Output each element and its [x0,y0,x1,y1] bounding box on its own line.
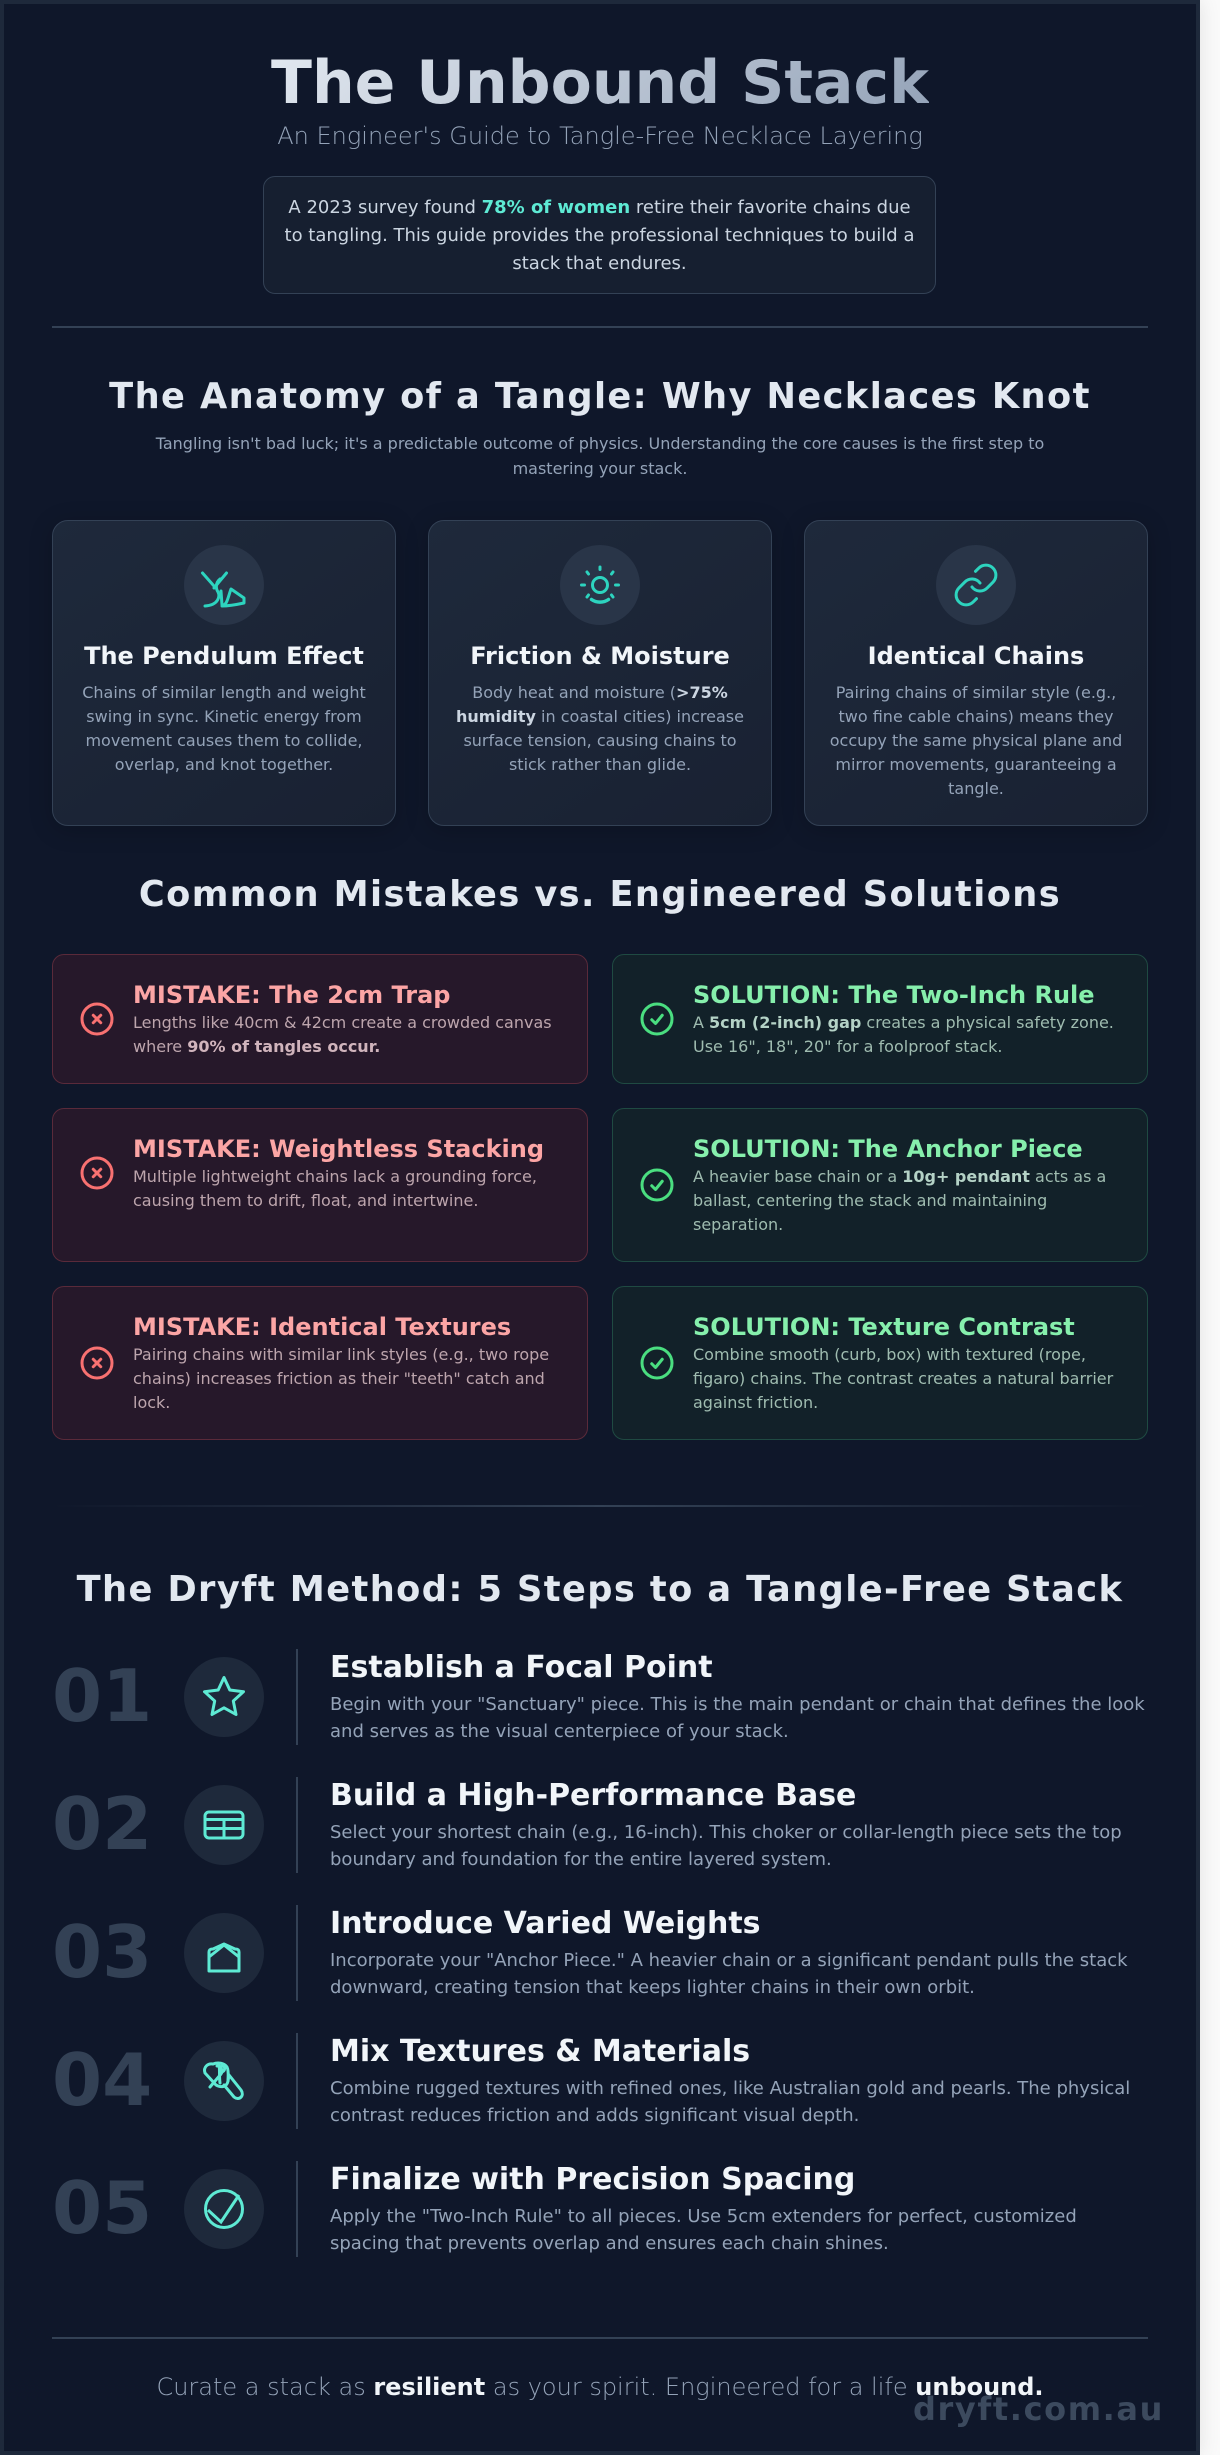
panel: solution two-inch rule [612,954,1148,1084]
subtitle: An Engineer's Guide to Tangle-Free Necklace Layering [277,122,923,150]
step text [330,2078,1130,2126]
solution text: separation. [693,1215,783,1234]
icon: check [184,2169,264,2249]
step number: 02 [52,1782,152,1866]
step title: Introduce Varied Weights [330,1906,761,1941]
card text: surface tension, causing chains to [463,731,737,750]
panel: mistake 2cm trap [52,954,588,1084]
step text: Select your shortest chain (e.g., 16-inch). This choker or collar-length piece sets the top [330,1822,1122,1843]
title: The Unbound Stack [271,48,929,118]
watermark: dryft.com.au [913,2390,1164,2428]
card text: humidity in coastal cities) increase [456,707,744,726]
card title: The Pendulum Effect [84,642,364,670]
step text: boundary and foundation for the entire layered system. [330,1849,832,1870]
step text [330,1694,1145,1742]
step 2 [52,1777,1122,1873]
card text [456,683,744,774]
step title: Finalize with Precision Spacing [330,2162,855,2197]
solution text: A heavier base chain or a 10g+ pendant acts as a [693,1167,1106,1186]
solution title: SOLUTION: Texture Contrast [693,1313,1075,1341]
card text: Chains of similar length and weight [82,683,366,702]
icon: check circle [640,1168,674,1202]
anatomy intro text: mastering your stack. [513,459,687,478]
step text: spacing that prevents overlap and ensures each chain shines. [330,2233,889,2254]
step text: Incorporate your "Anchor Piece." A heavier chain or a significant pendant pulls the stack [330,1950,1128,1971]
panel: solution texture contrast [612,1286,1148,1440]
card text: Pairing chains of similar style (e.g., [836,683,1116,702]
mistake text: Multiple lightweight chains lack a grounding force, [133,1167,537,1186]
card title: Friction & Moisture [470,642,730,670]
step number: 05 [52,2166,152,2250]
mistake text: where 90% of tangles occur. [133,1037,380,1056]
step text: Combine rugged textures with refined ones, like Australian gold and pearls. The physical [330,2078,1130,2099]
step text: contrast reduces friction and adds significant visual depth. [330,2105,859,2126]
solution text: A 5cm (2-inch) gap creates a physical safety zone. [693,1013,1114,1032]
intro text: A 2023 survey found 78% of women retire their favorite chains due [288,197,911,218]
card title: Identical Chains [868,642,1084,670]
icon: tools [184,2041,264,2121]
mistake text: Lengths like 40cm & 42cm create a crowded canvas [133,1013,552,1032]
step 5 [52,2161,1077,2257]
mistake text: causing them to drift, float, and intertwine. [133,1191,478,1210]
icon: check circle [640,1346,674,1380]
step title: Establish a Focal Point [330,1650,713,1685]
card text: stick rather than glide. [509,755,691,774]
step title: Mix Textures & Materials [330,2034,750,2069]
step 1 [52,1649,1145,1745]
card text [82,683,366,774]
solution text: ballast, centering the stack and maintaining [693,1191,1047,1210]
icon: weight [184,1913,264,1993]
card text: tangle. [948,779,1004,798]
panel: mistake identical textures [52,1286,588,1440]
mistake text: chains) increases friction as their "teeth" catch and [133,1369,545,1388]
mistake title: MISTAKE: Identical Textures [133,1313,511,1341]
card text: two fine cable chains) means they [838,707,1114,726]
icon: pendulum [184,545,264,625]
panel: identical chains [804,520,1148,826]
heading: anatomy of a tangle: The Anatomy of a Tangle: Why Necklaces Knot [109,376,1091,417]
solution title: SOLUTION: The Anchor Piece [693,1135,1083,1163]
anatomy intro text [156,434,1044,478]
mistake text: Pairing chains with similar link styles (e.g., two rope [133,1345,549,1364]
step number: 04 [52,2038,152,2122]
step text: Apply the "Two-Inch Rule" to all pieces. Use 5cm extenders for perfect, customized [330,2206,1077,2227]
panel: pendulum effect [52,520,396,826]
mistake title: MISTAKE: The 2cm Trap [133,981,450,1009]
solution text [693,1345,1114,1412]
step number: 03 [52,1910,152,1994]
step text: downward, creating tension that keeps lighter chains in their own orbit. [330,1977,975,1998]
card text: Body heat and moisture (>75% [472,683,728,702]
mistake title: MISTAKE: Weightless Stacking [133,1135,544,1163]
solution title: SOLUTION: The Two-Inch Rule [693,981,1095,1009]
step text [330,2206,1077,2254]
icon: base panel [184,1785,264,1865]
card text: movement causes them to collide, [85,731,363,750]
solution text: Combine smooth (curb, box) with textured (rope, [693,1345,1086,1364]
card text: swing in sync. Kinetic energy from [86,707,362,726]
card text: occupy the same physical plane and [830,731,1122,750]
icon: star [184,1657,264,1737]
mistake text [133,1167,537,1210]
intro text: stack that endures. [512,253,687,274]
panel: solution anchor piece [612,1108,1148,1262]
icon: x circle [80,1156,114,1190]
heading: mistakes vs solutions: Common Mistakes vs. Engineered Solutions [139,874,1061,915]
card text [830,683,1122,798]
icon: x circle [80,1002,114,1036]
solution text: against friction. [693,1393,818,1412]
intro text [285,197,914,274]
heading: the dryft method: The Dryft Method: 5 Steps to a Tangle-Free Stack [77,1569,1123,1610]
footer tagline: Curate a stack as resilient as your spirit. Engineered for a life unbound. [156,2373,1044,2401]
intro text: to tangling. This guide provides the professional techniques to build a [285,225,914,246]
card text: overlap, and knot together. [115,755,333,774]
icon: check circle [640,1002,674,1036]
panel: mistake weightless stacking [52,1108,588,1262]
step text [330,1822,1122,1870]
step 4 [52,2033,1130,2129]
step number: 01 [52,1654,152,1738]
icon: chain link [936,545,1016,625]
intro callout [263,176,936,294]
step text: and serves as the visual centerpiece of your stack. [330,1721,789,1742]
card text: mirror movements, guaranteeing a [835,755,1117,774]
icon: sun [560,545,640,625]
solution text: figaro) chains. The contrast creates a natural barrier [693,1369,1113,1388]
step text: Begin with your "Sanctuary" piece. This is the main pendant or chain that defines the look [330,1694,1145,1715]
step text [330,1950,1128,1998]
step title: Build a High-Performance Base [330,1778,856,1813]
mistake text: lock. [133,1393,170,1412]
mistake text [133,1345,549,1412]
anatomy intro text: Tangling isn't bad luck; it's a predictable outcome of physics. Understanding the core causes is the first step to [156,434,1044,453]
panel: friction and moisture [428,520,772,826]
solution text [693,1167,1106,1234]
mistake text [133,1013,552,1056]
solution text [693,1013,1114,1056]
step 3 [52,1905,1128,2001]
icon: x circle [80,1346,114,1380]
solution text: Use 16", 18", 20" for a foolproof stack. [693,1037,1002,1056]
